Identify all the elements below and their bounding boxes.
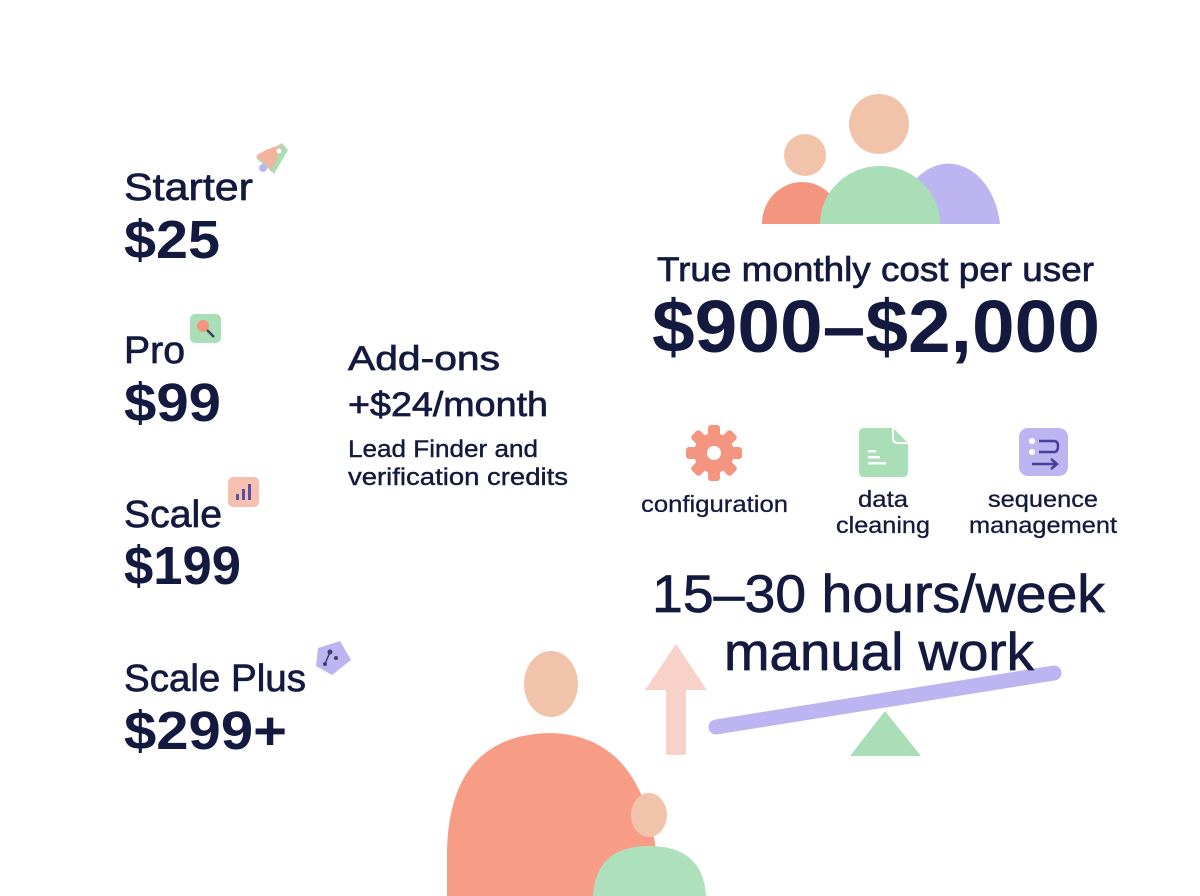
- plan: Starter: $25: [124, 210, 220, 270]
- plan: Scale: $199: [124, 536, 241, 596]
- headline: manual work: manual work: [724, 623, 1035, 682]
- icon: document: [859, 428, 908, 477]
- plan: Pro: Pro: [124, 330, 185, 372]
- icon: bar chart: [228, 477, 259, 507]
- label: data cleaning: [836, 486, 930, 538]
- add-ons text: +$24/month: [348, 386, 548, 424]
- plan: Pro: [124, 330, 221, 433]
- headline: true monthly cost: [652, 251, 1100, 368]
- plan: Pro: $99: [124, 373, 221, 433]
- headline: true monthly cost: $900–$2,000: [652, 285, 1100, 368]
- plan: Starter: [124, 167, 253, 270]
- add-ons text: Lead Finder and: [348, 436, 538, 463]
- icon: gear: [686, 425, 742, 481]
- label: data cleaning: cleaning: [836, 512, 930, 538]
- label: sequence management: [969, 486, 1118, 538]
- label: sequence management: management: [969, 512, 1118, 538]
- plan: Scale Plus: $299+: [124, 701, 287, 761]
- add-ons text: Add-ons: [348, 340, 500, 378]
- label: data cleaning: data: [858, 486, 908, 512]
- headline: true monthly cost: True monthly cost per user: [657, 251, 1094, 289]
- illustration: group of people: [762, 94, 1000, 224]
- icon: rocket: [256, 143, 288, 174]
- icon: network: [316, 641, 351, 675]
- headline: manual work: [652, 565, 1106, 682]
- label: configuration: configuration: [641, 491, 788, 517]
- headline: manual work: 15–30 hours/week: [652, 565, 1106, 624]
- arrow up: [645, 644, 707, 755]
- illustration: adult and child: [447, 651, 706, 896]
- label: sequence management: sequence: [988, 486, 1098, 512]
- seesaw: [716, 673, 1054, 756]
- add-ons text: verification credits: [348, 464, 568, 491]
- plan: Scale Plus: [124, 658, 306, 761]
- icon: magnifier: [190, 314, 221, 343]
- plan: Starter: Starter: [124, 167, 253, 209]
- plan: Scale: [124, 494, 241, 596]
- add-ons text: [348, 340, 568, 491]
- plan: Scale Plus: Scale Plus: [124, 658, 306, 700]
- icon: sequence: [1019, 428, 1068, 476]
- plan: Scale: Scale: [124, 494, 222, 536]
